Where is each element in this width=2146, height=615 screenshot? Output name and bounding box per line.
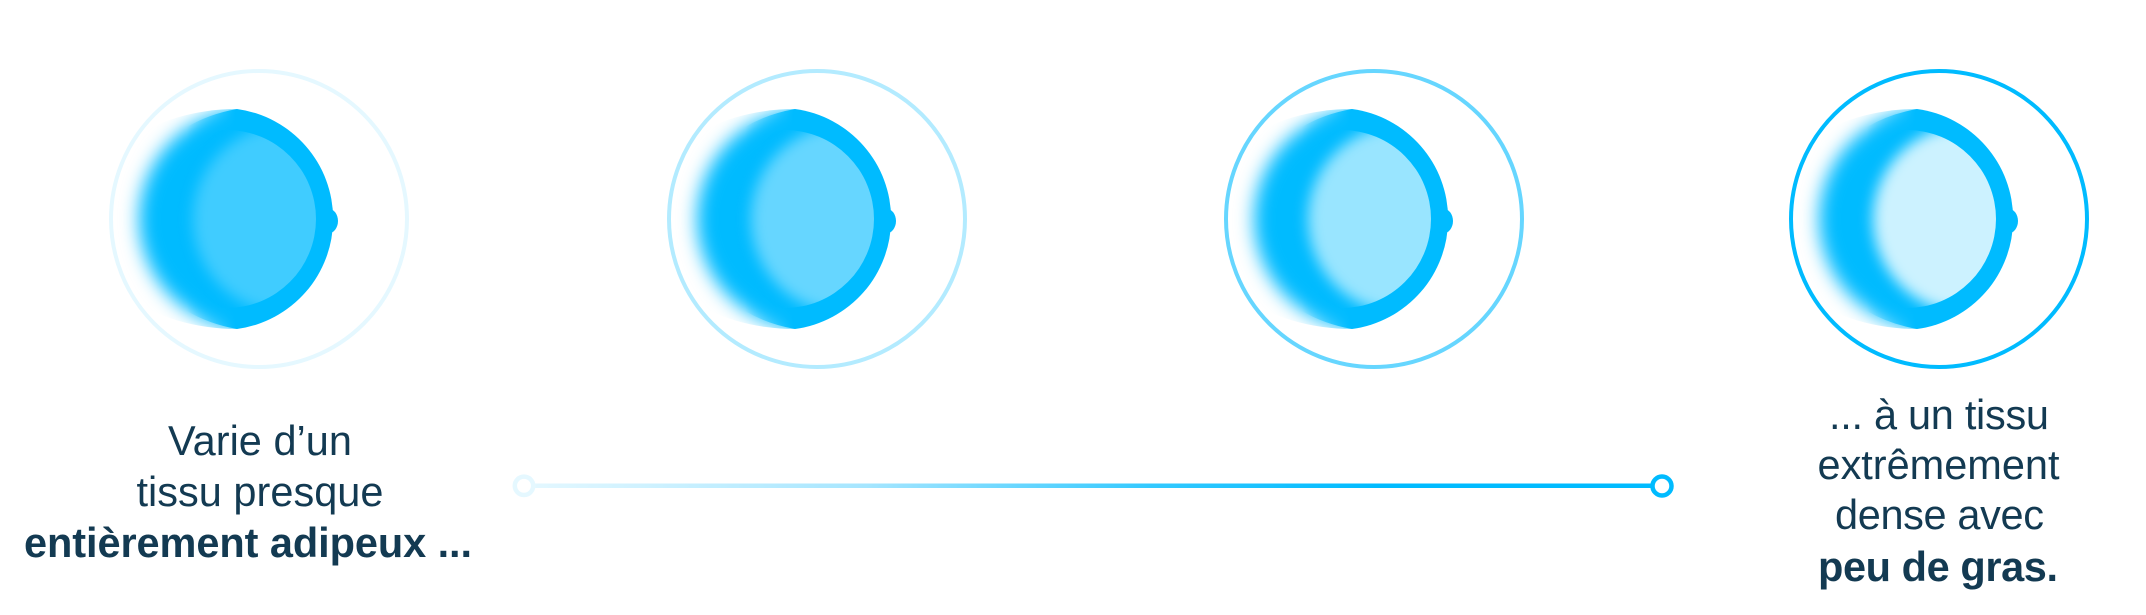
- diagram: breast, scattered density: [669, 71, 965, 367]
- text block: right caption: ... à un tissu: [1829, 391, 2049, 438]
- nipple: [876, 208, 896, 234]
- text block: left caption: Varie d’un: [168, 417, 352, 464]
- blurred left side of breast: [1238, 109, 1352, 329]
- outer ring: [669, 71, 965, 367]
- diagram: breast, almost entirely fatty tissue: [111, 71, 407, 367]
- diagram: breast, extremely dense: [1791, 71, 2087, 367]
- arrow: gradient scale line with end markers: [515, 476, 1671, 496]
- blurred left side of breast: [1804, 109, 1917, 329]
- outer ring: [1791, 71, 2087, 367]
- text block: left caption: [24, 417, 472, 566]
- text block: right caption: peu de gras.: [1818, 543, 2058, 590]
- breast outline: [1302, 109, 1448, 329]
- text block: right caption: extrêmement: [1818, 441, 2060, 488]
- text block: left caption: entièrement adipeux ...: [24, 519, 472, 566]
- outer ring: [1226, 71, 1522, 367]
- diagram: breast, heterogeneously dense: [1226, 71, 1522, 367]
- text block: right caption: dense avec: [1835, 491, 2044, 538]
- text block: right caption: [1818, 391, 2060, 590]
- blurred left side of breast: [682, 109, 795, 329]
- breast outline: [1867, 109, 2013, 329]
- blurred left side of breast: [124, 109, 237, 329]
- breast outline: [745, 109, 891, 329]
- inner tissue: [186, 131, 316, 307]
- inner tissue: [1298, 130, 1431, 308]
- breast outline: [187, 109, 333, 329]
- inner tissue: [742, 130, 874, 308]
- nipple: [1433, 208, 1453, 234]
- nipple: [1998, 208, 2018, 234]
- inner tissue: [1862, 130, 1996, 308]
- outer ring: [111, 71, 407, 367]
- nipple: [318, 208, 338, 234]
- text block: left caption: tissu presque: [136, 468, 384, 515]
